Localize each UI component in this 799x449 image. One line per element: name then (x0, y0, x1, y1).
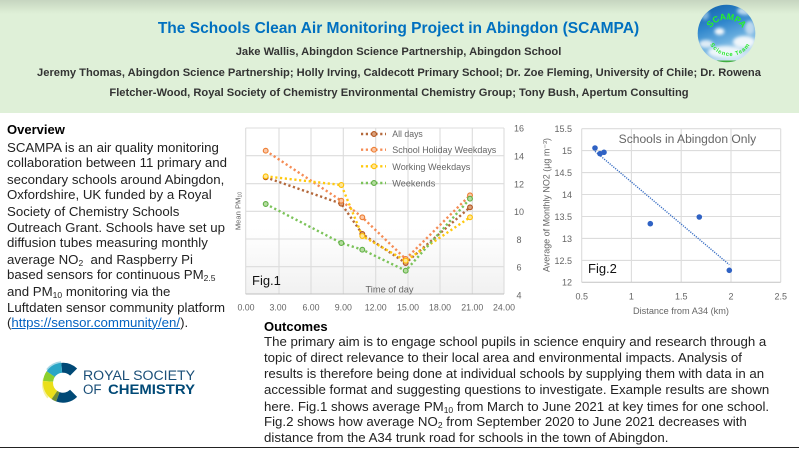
x axis labels: Fig.1: 9.00 (335, 302, 352, 312)
co-authors (37, 67, 762, 99)
axis title: mean PM10: Mean PM (234, 198, 242, 230)
axis title: distance from A34: Distance from A34 (km) (633, 306, 729, 316)
y axis labels: Fig.1 (514, 124, 524, 300)
panel: overview text: Oxfordshire, UK funded by a Royal (7, 186, 212, 202)
icon: Royal Society of Chemistry logo (43, 362, 195, 398)
icon: SCAMPA logo: Science Team (710, 43, 750, 56)
panel: outcomes text: The primary aim is to engage school pupils in science enquiry and research through a (264, 334, 766, 348)
legend: Fig.1 series: Weekends (392, 178, 436, 188)
x axis labels: Fig.2: 2.5 (774, 292, 787, 302)
x axis labels: Fig.2: 0.5 (575, 292, 588, 302)
panel: overview text: Outreach Grant. Schools have set up (7, 220, 225, 234)
x axis labels: Fig.1 (237, 302, 515, 312)
x axis labels: Fig.1: 3.00 (269, 302, 287, 312)
panel: outcomes text: distance from the A34 trunk road for schools in the town of Abingdon. (264, 430, 668, 444)
legend: Fig.1 series: All days (392, 129, 423, 139)
y axis labels: Fig.2: 15.5 (554, 124, 572, 134)
heading: overview: Overview (7, 122, 65, 136)
data points (592, 145, 732, 273)
axis title: mean PM10: 10 (238, 192, 244, 198)
panel: overview text: average NO2 and Raspberry Pi (7, 252, 193, 268)
panel: overview text: Luftdaten sensor community platform (7, 300, 225, 314)
y axis labels: Fig.2: 14.5 (554, 168, 572, 178)
y axis labels: Fig.1: 10 (514, 207, 524, 217)
panel: outcomes text: topic of direct relevance to their local area and environmental impacts. Analysis of (264, 350, 742, 364)
x axis labels: Fig.1: 21.00 (461, 302, 483, 312)
y axis labels: Fig.2: 12.5 (554, 256, 572, 266)
trendline (595, 151, 729, 265)
x axis labels: Fig.1: 6.00 (302, 302, 320, 312)
y axis labels: Fig.2 (554, 124, 572, 288)
y axis labels: Fig.1: 6 (516, 262, 522, 272)
axis title: time of day: Time of day (366, 284, 414, 294)
label: Fig.1: Fig.1 (252, 273, 281, 288)
legend: Fig.1 series: Working Weekdays (392, 162, 471, 172)
x axis labels: Fig.2 (575, 292, 787, 302)
panel: overview text: diffusion tubes measuring monthly (7, 234, 208, 250)
x axis labels: Fig.1: 24.00 (493, 302, 515, 312)
chart: Fig.2 NO2 against distance from A34 (542, 124, 787, 316)
bottom rule (0, 447, 799, 448)
x axis labels: Fig.2: 1 (629, 292, 634, 302)
co-authors: Jeremy Thomas, Abingdon Science Partnership; Holly Irving, Caldecott Primary School; Dr. Zoe Fleming, University of Chile; Dr. Rowena (37, 67, 761, 79)
legend: Fig.1 series (361, 129, 497, 188)
lead author: Jake Wallis, Abingdon Science Partnership, Abingdon School (236, 46, 561, 58)
x axis labels: Fig.1: 15.00 (397, 302, 419, 312)
chart title: schools in Abingdon only: Schools in Abingdon Only (619, 134, 756, 146)
x axis labels: Fig.1: 0.00 (237, 302, 255, 312)
panel: overview text: based sensors for continuous PM2.5 (7, 266, 215, 283)
panel: overview text: secondary schools around Abingdon, (7, 172, 224, 186)
x axis labels: Fig.1: 12.00 (365, 302, 387, 312)
panel: overview text: Society of Chemistry Schools (7, 204, 179, 218)
panel: overview text: SCAMPA is an air quality monitoring (7, 140, 219, 154)
panel: overview text: collaboration between 11 primary and (7, 154, 227, 170)
y axis labels: Fig.2: 13 (562, 234, 572, 244)
y axis labels: Fig.1: 8 (516, 235, 522, 245)
axis title: average monthly NO2: Average of Monthly NO2 (µg m⁻³) (542, 138, 552, 272)
y axis labels: Fig.2: 14 (562, 190, 572, 200)
icon: Royal Society of Chemistry logo: ROYAL SOCIETY (83, 368, 195, 383)
x axis labels: Fig.2: 1.5 (675, 292, 687, 302)
panel: header band (0, 0, 799, 113)
y axis labels: Fig.1: 14 (514, 152, 524, 162)
icon: Royal Society of Chemistry logo: CHEMISTRY (108, 382, 195, 397)
x axis labels: Fig.2: 2 (728, 292, 734, 302)
heading: outcomes: Outcomes (264, 318, 328, 334)
x axis labels: Fig.1: 18.00 (429, 302, 451, 312)
y axis labels: Fig.2: 15 (562, 146, 572, 156)
panel: outcomes text: accessible format and suggesting questions to investigate. Example results are shown (264, 382, 769, 396)
legend: Fig.1 series: School Holiday Weekdays (392, 145, 497, 155)
icon: Royal Society of Chemistry logo: OF (83, 382, 102, 397)
panel: overview text (7, 122, 227, 330)
co-authors: Fletcher-Wood, Royal Society of Chemistry Environmental Chemistry Group; Tony Bush, Apertum Consulting (109, 87, 689, 99)
y axis labels: Fig.1: 12 (514, 180, 524, 190)
title: The Schools Clean Air Monitoring Project in Abingdon (SCAMPA) (158, 20, 639, 37)
y axis labels: Fig.2: 13.5 (554, 212, 572, 222)
y axis labels: Fig.1: 16 (514, 124, 524, 134)
panel: outcomes text: here. Fig.1 shows average PM10 from March to June 2021 at key times for one school. (264, 398, 769, 415)
panel: outcomes text: Fig.2 shows how average NO2 from September 2020 to June 2021 decreases with (264, 414, 747, 430)
panel: outcomes text: results is therefore being done at individual schools by supplying them with data in an (264, 366, 764, 380)
panel: overview text: (https://sensor.community/en/). (7, 314, 188, 330)
y axis labels: Fig.2: 12 (562, 278, 572, 288)
icon: SCAMPA logo (698, 4, 756, 62)
y axis labels: Fig.1: 4 (516, 290, 522, 300)
panel: outcomes text (264, 318, 769, 444)
panel: overview text: and PM10 monitoring via the (7, 284, 170, 300)
icon: SCAMPA logo: SCAMPA (706, 13, 746, 28)
label: Fig.2: Fig.2 (588, 261, 617, 276)
